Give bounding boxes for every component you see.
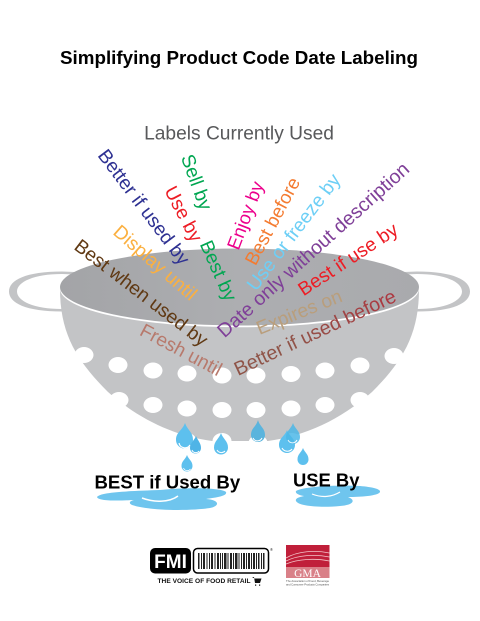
drop xyxy=(298,448,308,465)
drop xyxy=(214,433,228,454)
label: expires on: Expires on xyxy=(254,286,345,340)
GMA wordmark: GMA xyxy=(294,568,322,580)
barcode bars xyxy=(198,553,264,569)
label: date only without description: Date only without description xyxy=(213,158,414,342)
GMA descriptor: The Association of Food, Beverage xyxy=(286,579,329,583)
subtitle: labels currently used: Labels Currently Used xyxy=(144,124,334,144)
registered mark: ® xyxy=(270,547,273,552)
drop xyxy=(176,423,193,448)
GMA white swooshes xyxy=(286,551,330,564)
logo: FMI: FMI xyxy=(154,552,187,573)
GMA red panel xyxy=(286,545,330,578)
drop xyxy=(251,420,265,442)
title: Simplifying Product Code Date Labeling xyxy=(60,47,418,68)
label: better if used before: Better if used before xyxy=(231,285,400,381)
label: display until: Display until xyxy=(109,221,201,305)
falling labels xyxy=(70,146,414,381)
drop xyxy=(182,455,192,472)
bottom scalloped holes xyxy=(178,433,302,451)
logo: FMI xyxy=(150,547,273,586)
puddle: left xyxy=(97,488,226,510)
right handle xyxy=(404,272,470,312)
row one of holes xyxy=(74,347,404,384)
barcode frame xyxy=(194,548,268,573)
logo: GMA xyxy=(286,545,330,586)
left handle xyxy=(9,272,75,312)
GMA descriptor second line: and Consumer Products Companies xyxy=(286,582,330,586)
caption: use by: USE By xyxy=(293,470,360,490)
drop xyxy=(190,436,201,454)
drop xyxy=(286,423,300,444)
colander rim xyxy=(60,250,419,327)
label: enjoy by: Enjoy by xyxy=(223,178,268,252)
caption: best if used by: BEST if Used By xyxy=(94,472,241,492)
label: sell by: Sell by xyxy=(176,152,216,214)
FMI tagline: THE VOICE OF FOOD RETAIL xyxy=(158,578,250,585)
label: use by: Use by xyxy=(160,183,206,246)
label: fresh until: Fresh until xyxy=(136,320,225,381)
row two of holes xyxy=(110,392,370,418)
label: use or freeze by: Use or freeze by xyxy=(243,170,346,295)
colander xyxy=(9,248,470,451)
FMI badge xyxy=(150,548,191,574)
drop xyxy=(279,430,295,453)
label: best if use by: Best if use by xyxy=(295,219,403,301)
label: best before: Best before xyxy=(240,174,304,268)
label: best when used by: Best when used by xyxy=(70,236,212,351)
label: best by: Best by xyxy=(195,237,240,305)
water drops xyxy=(176,420,308,472)
label: better if used by: Better if used by xyxy=(93,146,193,270)
colander body xyxy=(60,289,419,441)
puddle: right xyxy=(296,486,380,507)
icon: shopping cart xyxy=(252,577,262,586)
